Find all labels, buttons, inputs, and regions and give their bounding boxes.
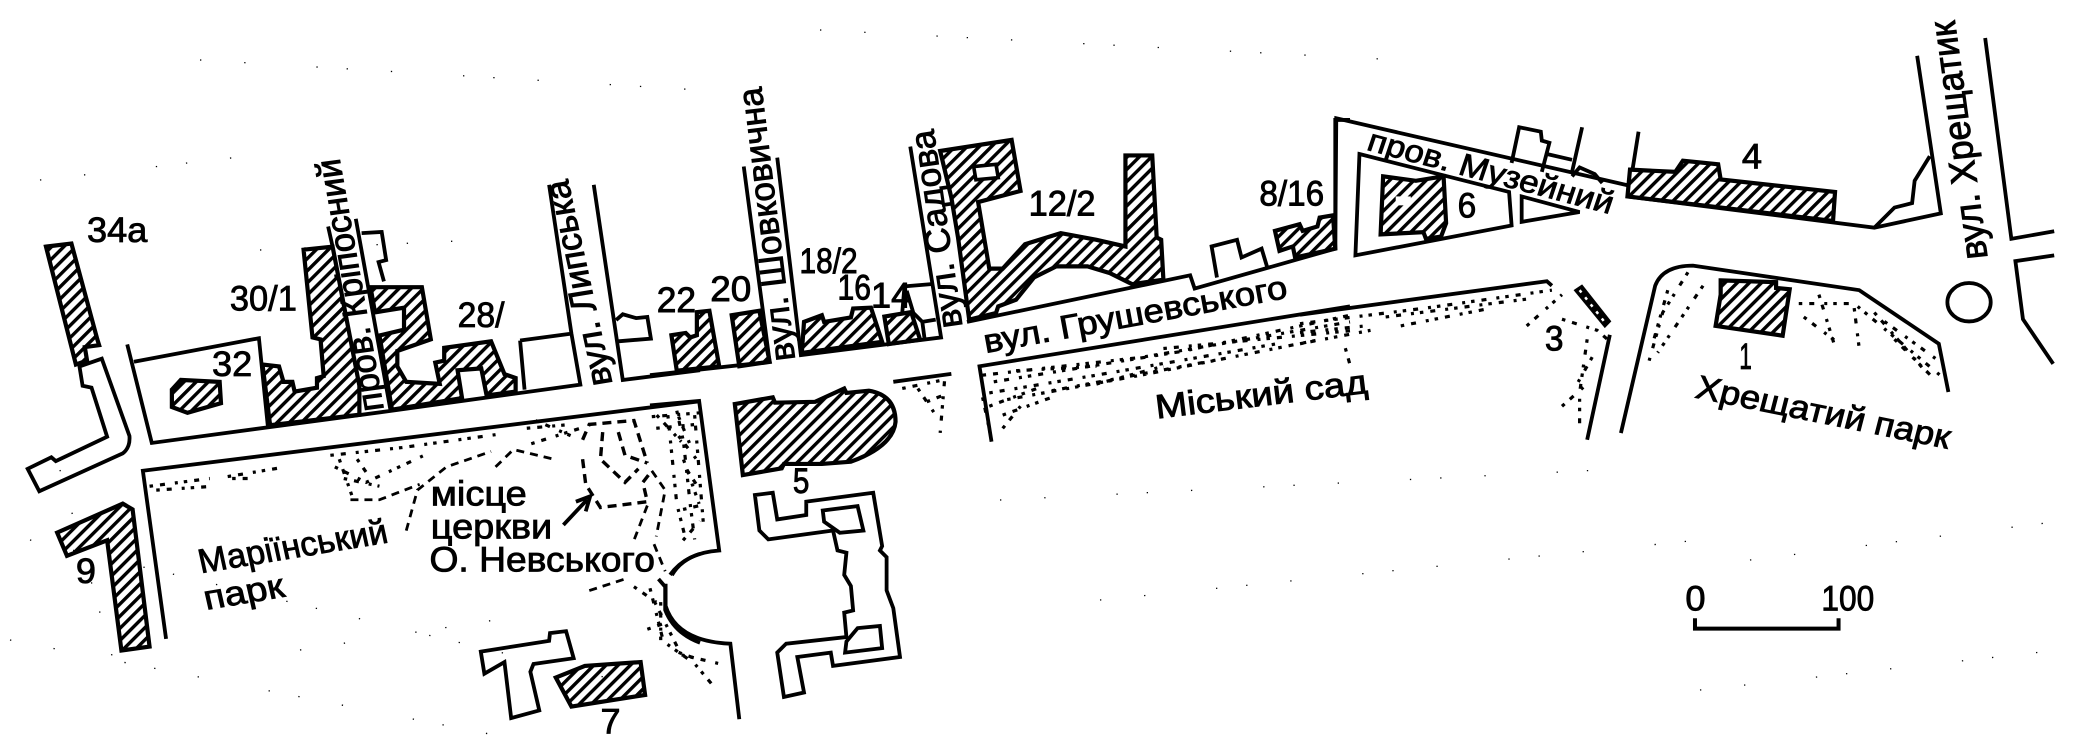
dots: triangle and garden xyxy=(902,315,1350,440)
buildings 18/2 and 16 xyxy=(802,308,882,353)
building 34a xyxy=(46,244,99,364)
building 7 outline xyxy=(481,631,574,718)
block 6 outline xyxy=(1355,154,1512,255)
dots: garden and park xyxy=(1300,272,1940,424)
building 8/16 xyxy=(1275,215,1335,258)
label 1: 1 xyxy=(1739,336,1752,378)
triangle block xyxy=(1522,196,1580,222)
church site label line 3: О. Невського xyxy=(429,540,655,579)
park dot texture xyxy=(150,413,700,660)
map section: east xyxy=(1300,19,2054,629)
label 7: 7 xyxy=(600,702,621,742)
building 22 xyxy=(671,311,719,371)
street label Lypska: вул. Липська xyxy=(537,177,620,389)
label 14: 14 xyxy=(871,276,911,316)
arrow to church site xyxy=(563,496,590,525)
inner courtyards xyxy=(823,506,882,653)
building 28 xyxy=(371,287,516,410)
label 32: 32 xyxy=(212,345,252,384)
monument 3 xyxy=(1574,284,1611,328)
north street edge east xyxy=(967,120,1350,322)
building 5 xyxy=(735,388,896,475)
building 12/2 xyxy=(940,140,1163,320)
label 18/2: 18/2 xyxy=(800,241,858,281)
label 12/2: 12/2 xyxy=(1029,183,1096,223)
label 8/16: 8/16 xyxy=(1259,174,1324,214)
park dotted paths xyxy=(350,450,665,591)
map section: west xyxy=(28,157,700,742)
label 6: 6 xyxy=(1458,186,1476,225)
park label: парк xyxy=(200,566,289,617)
Khreshchatyk east edges xyxy=(1985,38,2054,364)
street label Sadova: вул. Садова xyxy=(904,127,970,331)
label 5: 5 xyxy=(793,461,809,501)
scale label 100: 100 xyxy=(1821,579,1874,618)
garden edge east xyxy=(1300,281,1610,440)
outline buildings by Sadova xyxy=(902,284,936,339)
building 12/2 courtyard xyxy=(974,164,998,180)
building 1 xyxy=(1716,280,1790,336)
Miskyi garden north edge xyxy=(979,306,1350,442)
scale label 0: 0 xyxy=(1685,579,1706,618)
building 14 xyxy=(884,312,920,344)
outline building by Kriposnyi lane xyxy=(362,232,386,281)
block 32 outline xyxy=(127,185,700,443)
building 7 xyxy=(556,662,645,707)
outline building south of 34a xyxy=(28,359,130,491)
church site label: місце xyxy=(431,474,527,513)
label 16: 16 xyxy=(838,268,871,308)
north street edge and side streets xyxy=(650,147,941,375)
map section: centre xyxy=(650,85,1370,719)
park label Khreshchatyi: Хрещатий парк xyxy=(1692,369,1955,456)
building 30/1 xyxy=(263,247,359,425)
outline building by Lypska street xyxy=(616,314,651,341)
triangle garden edge xyxy=(893,374,951,382)
north edge by building 4 and Khreshchatyk xyxy=(1627,56,1941,228)
label 9: 9 xyxy=(76,551,96,591)
church site label line 2: церкви xyxy=(431,507,552,546)
park label Mariinskyi: Маріїнський xyxy=(194,512,391,580)
plaza curve west xyxy=(658,554,700,643)
street label Kriposnyi: пров. Кріпосний xyxy=(309,157,391,414)
building 20 xyxy=(732,311,770,366)
church site dashed outline xyxy=(583,421,652,507)
street label Hrushevskoho: вул. Грушевського xyxy=(980,268,1290,360)
Khreshchatyi park outline xyxy=(1621,266,1948,433)
label 30/1: 30/1 xyxy=(230,279,297,319)
roundabout circle xyxy=(1947,283,1991,321)
garden label: Міський сад xyxy=(1153,363,1370,427)
dots: park east edge xyxy=(650,411,719,690)
building 9 xyxy=(57,504,150,650)
outline building west of 8/16 xyxy=(1212,240,1267,278)
label 3: 3 xyxy=(1545,319,1563,358)
building 4 xyxy=(1627,161,1835,221)
monument 3 fill xyxy=(1574,284,1611,328)
label 4: 4 xyxy=(1742,137,1762,176)
scale bar xyxy=(1695,618,1839,629)
label 28/: 28/ xyxy=(458,296,505,335)
building 32 xyxy=(172,380,221,413)
street label Khreshchatyk: вул. Хрещатик xyxy=(1922,19,1996,262)
outline buildings north of lane xyxy=(1512,127,1602,183)
building 6 xyxy=(1381,176,1446,239)
south edge of street xyxy=(143,401,700,639)
label 34a: 34а xyxy=(87,211,148,250)
lane label Muzeinyi: пров. Музейний xyxy=(1363,123,1619,221)
label 22: 22 xyxy=(657,280,696,320)
plaza curve and park east edge xyxy=(650,401,739,719)
museum lane block outline xyxy=(1335,118,1627,250)
label 20: 20 xyxy=(710,269,751,309)
monument 3 spots xyxy=(1580,290,1605,322)
building 6 courtyard xyxy=(1396,196,1411,205)
street label Shovkovychna: вул. Шовковична xyxy=(731,85,803,363)
outline building south of 5 xyxy=(755,493,900,697)
